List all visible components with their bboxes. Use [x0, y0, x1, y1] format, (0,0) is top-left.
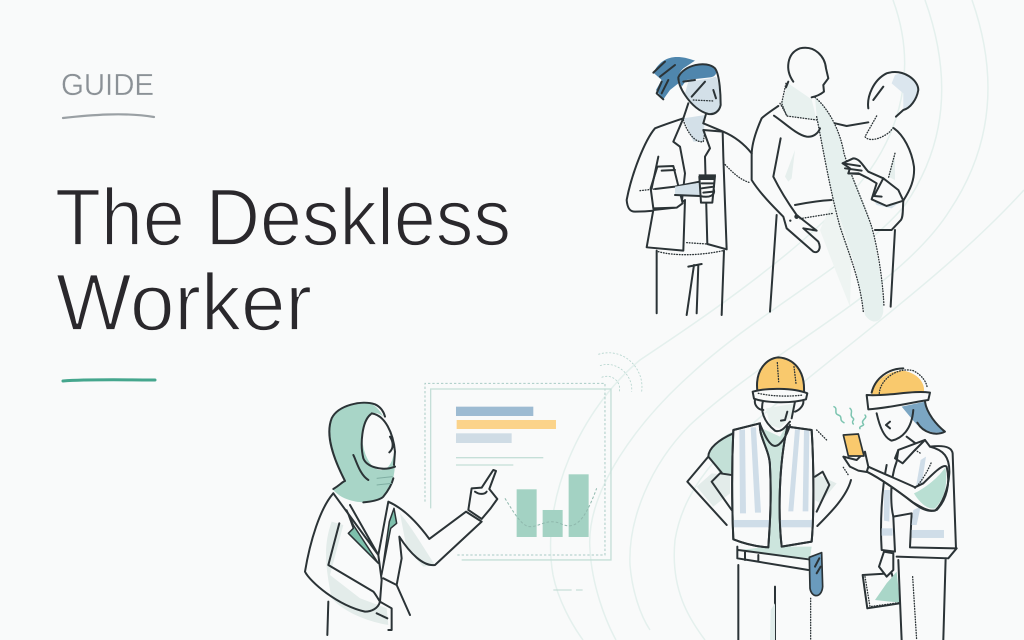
illustration: two construction workers [687, 357, 957, 640]
figure: worker with phone [843, 368, 957, 640]
title: Worker [56, 258, 312, 348]
bar chart: horizontal [456, 407, 556, 443]
figure: worker with hands on hips [687, 357, 851, 640]
bar chart: vertical [517, 474, 589, 537]
figure: person with short hair [835, 72, 918, 307]
icon: signal squiggles [834, 407, 866, 429]
figure: central person with scarf [752, 48, 884, 322]
figure: woman in hijab [305, 403, 497, 635]
icon: wifi signal [598, 353, 642, 392]
accent underline [63, 380, 155, 381]
label: GUIDE [61, 67, 154, 118]
title [55, 173, 511, 348]
title: The Deskless [55, 173, 511, 263]
illustration: three colleagues talking [627, 48, 918, 322]
illustration: doctor presenting data [305, 353, 642, 635]
figure: man with coffee [627, 57, 752, 315]
label: GUIDE: GUIDE [61, 67, 154, 102]
data panel [425, 383, 611, 590]
